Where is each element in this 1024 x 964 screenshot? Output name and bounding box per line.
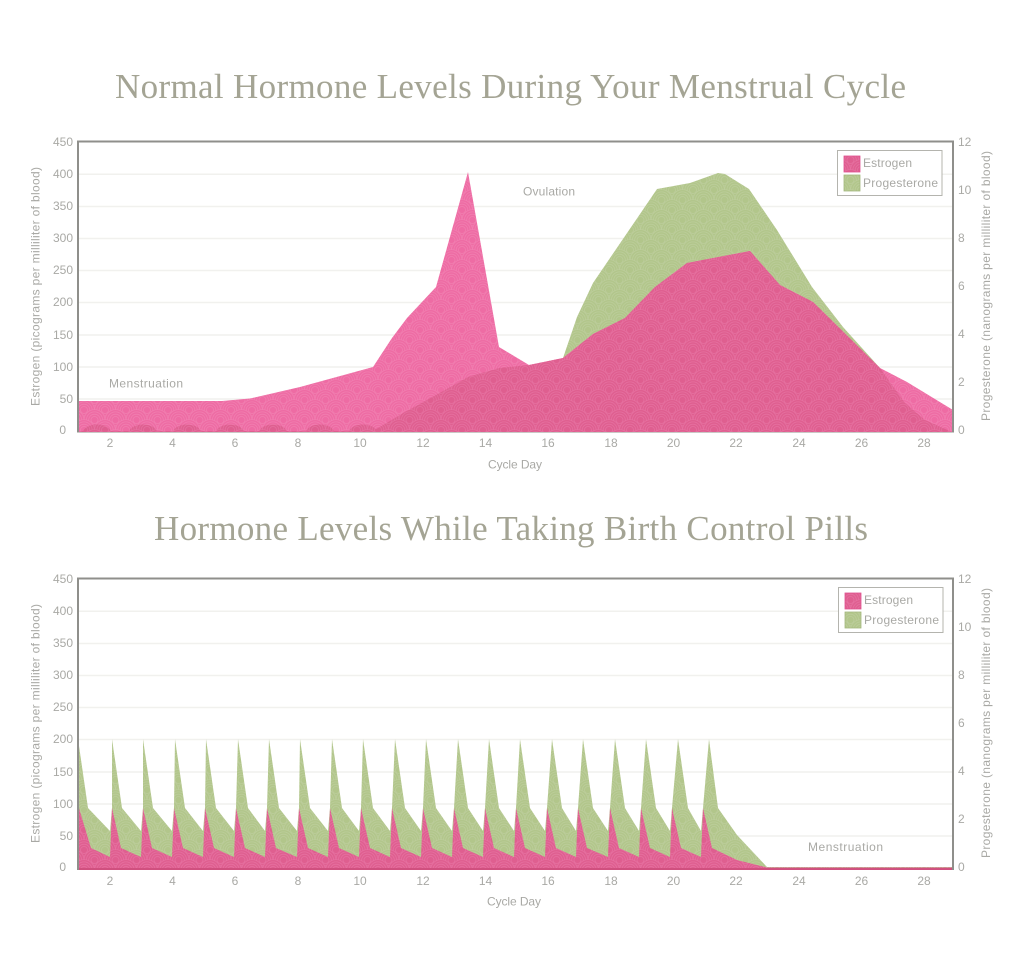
- x axis values: [107, 436, 931, 450]
- annotation: menstruation: Menstruation: [808, 840, 883, 854]
- left axis values: 450: [53, 135, 73, 149]
- x axis values: 26: [855, 874, 868, 888]
- left axis values: 450: [53, 572, 73, 586]
- right axis values: 10: [958, 620, 972, 634]
- left axis title: Estrogen (picograms per milliliter of blood): [28, 604, 42, 843]
- chart: birth control pills: [28, 572, 993, 908]
- x axis values: 4: [169, 436, 176, 450]
- left axis title: Estrogen (picograms per milliliter of blood): [28, 167, 42, 406]
- x axis values: 6: [232, 874, 239, 888]
- x axis values: 24: [792, 436, 806, 450]
- x axis values: 14: [479, 874, 492, 888]
- x axis values: 12: [416, 874, 430, 888]
- x axis values: 14: [479, 436, 492, 450]
- left axis values: 0: [59, 423, 66, 437]
- x axis values: 28: [917, 436, 931, 450]
- legend: Estrogen: [864, 593, 913, 607]
- x axis values: 12: [416, 436, 430, 450]
- x axis values: 4: [169, 874, 176, 888]
- right axis values: 2: [958, 375, 965, 389]
- x axis values: 8: [295, 874, 302, 888]
- area: progesterone: [373, 173, 953, 432]
- left axis values: [53, 135, 73, 437]
- right axis values: 12: [958, 572, 972, 586]
- x axis values: 16: [541, 436, 555, 450]
- x axis values: 2: [107, 436, 114, 450]
- left axis values: [53, 572, 73, 874]
- plot frame: [78, 142, 953, 432]
- x axis values: 22: [729, 436, 743, 450]
- left axis values: 0: [59, 860, 66, 874]
- x axis values: [107, 874, 931, 888]
- left axis values: 350: [53, 636, 73, 650]
- plot frame: [78, 578, 953, 870]
- x axis values: 18: [604, 874, 618, 888]
- area: estrogen: [77, 172, 953, 432]
- x axis values: 16: [541, 874, 555, 888]
- x axis values: 2: [107, 874, 114, 888]
- right axis title: Progesterone (nanograms per milliliter of blood): [979, 151, 993, 421]
- right axis values: [958, 135, 972, 437]
- x axis values: 20: [667, 874, 680, 888]
- left axis values: 150: [53, 765, 73, 779]
- x axis values: 24: [792, 874, 806, 888]
- chart: normal menstrual cycle: [28, 135, 993, 472]
- area: estrogen and progesterone overlap: [77, 251, 953, 432]
- title: birth control pills: Hormone Levels While Taking Birth Control Pills: [154, 509, 868, 548]
- right axis values: 6: [958, 716, 965, 730]
- x axis values: 26: [855, 436, 868, 450]
- right axis values: 6: [958, 279, 965, 293]
- right axis values: [958, 572, 972, 874]
- left axis values: 250: [53, 700, 73, 714]
- left axis values: 50: [60, 392, 73, 406]
- x axis title: Cycle Day: [488, 458, 542, 472]
- legend: Progesterone: [863, 176, 938, 190]
- left axis values: 200: [53, 732, 73, 746]
- right axis values: 2: [958, 812, 965, 826]
- left axis values: 400: [53, 604, 73, 618]
- x axis values: 6: [232, 436, 239, 450]
- right axis title: Progesterone (nanograms per milliliter of blood): [979, 588, 993, 858]
- right axis values: 4: [958, 327, 965, 341]
- area: progesterone: [78, 739, 953, 869]
- left axis values: 300: [53, 231, 73, 245]
- right axis values: 4: [958, 764, 965, 778]
- x axis values: 28: [917, 874, 931, 888]
- right axis values: 8: [958, 668, 965, 682]
- baseline: [77, 432, 953, 434]
- left axis values: 350: [53, 199, 73, 213]
- x axis values: 10: [353, 874, 367, 888]
- legend: Progesterone: [864, 613, 939, 627]
- left axis values: 300: [53, 668, 73, 682]
- x axis values: 22: [729, 874, 743, 888]
- legend: Estrogen: [863, 156, 912, 170]
- annotation: menstruation: Menstruation: [109, 376, 183, 390]
- left axis values: 50: [60, 829, 73, 843]
- right axis values: 12: [958, 135, 972, 149]
- left axis values: 200: [53, 295, 73, 309]
- right axis values: 10: [958, 183, 972, 197]
- baseline: [77, 868, 953, 870]
- left axis values: 150: [53, 328, 73, 342]
- left axis values: 250: [53, 263, 73, 277]
- title: normal hormone levels: Normal Hormone Levels During Your Menstrual Cycle: [115, 67, 906, 106]
- legend: [838, 588, 943, 632]
- left axis values: 100: [53, 797, 73, 811]
- x axis values: 10: [353, 436, 367, 450]
- right axis values: 8: [958, 231, 965, 245]
- right axis values: 0: [958, 860, 965, 874]
- x axis values: 18: [604, 436, 618, 450]
- x axis title: Cycle Day: [487, 894, 541, 908]
- annotation: ovulation: Ovulation: [523, 184, 575, 198]
- x axis values: 8: [295, 436, 302, 450]
- right axis values: 0: [958, 423, 965, 437]
- left axis values: 400: [53, 167, 73, 181]
- legend: [838, 150, 942, 196]
- x axis values: 20: [667, 436, 680, 450]
- area: estrogen: [77, 805, 953, 870]
- left axis values: 100: [53, 360, 73, 374]
